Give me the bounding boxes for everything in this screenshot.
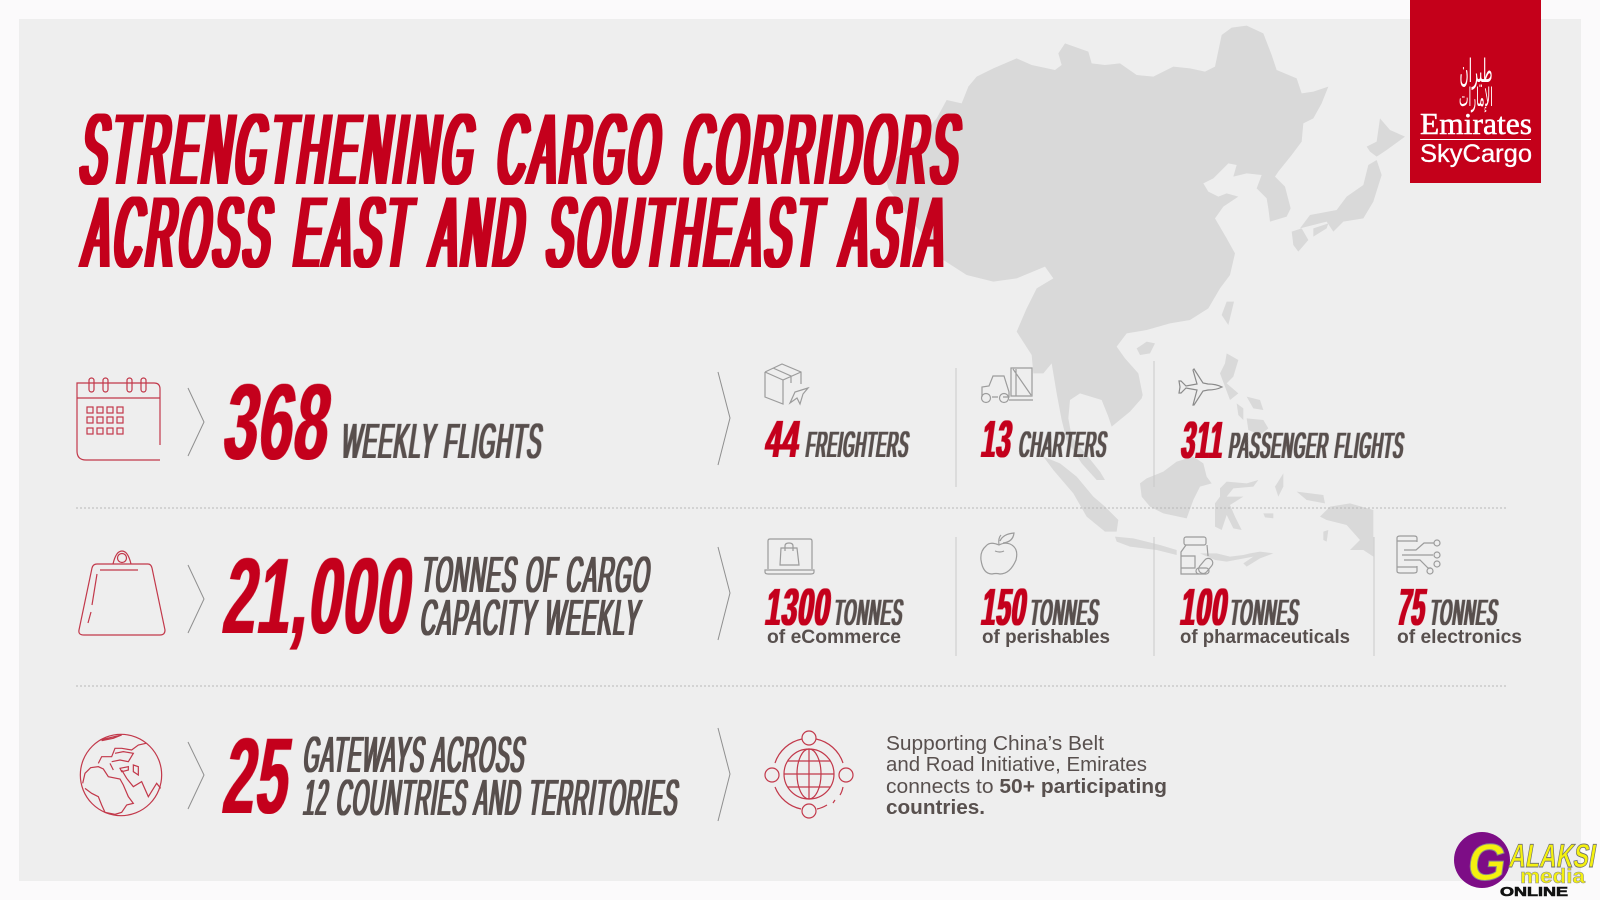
arrow: large chevron [718,728,730,821]
label: tonnes of cargo capacity weekly [417,546,655,646]
arrow: large chevron [718,547,730,640]
stat: 150 tonnes of perishables: 150 [978,579,1031,637]
arrow: chevron [188,742,204,809]
arrow: large chevron [718,372,730,465]
icon: box with plane [765,364,808,404]
icon: apple [981,533,1017,574]
row 2: tonnes capacity: CAPACITY WEEKLY [417,589,645,646]
stat: 100 tonnes of pharmaceuticals [1177,579,1350,648]
icon: network globe [765,731,853,818]
text: Belt and Road [886,733,1167,819]
stat: 150 tonnes of perishables [978,579,1110,648]
icon: weight [79,551,165,635]
row 2: tonnes capacity: TONNES OF CARGO [418,546,655,603]
stat: 13 charters [978,411,1111,469]
stat: 1300 tonnes of eCommerce: of eCommerce [767,627,901,648]
label: gateways across 12 countries and territories [300,726,683,826]
icon: earth globe [80,734,162,816]
icon: calendar [77,378,160,460]
title [75,92,972,289]
row 3: gateways [80,715,1167,836]
stat: 44 freighters [762,411,913,469]
row 2: tonnes capacity: TONNES [1028,591,1103,633]
stat: 150 tonnes of perishables: of perishables [982,627,1110,648]
stat: 100 tonnes of pharmaceuticals: TONNES [1228,591,1303,633]
icon: plane [1179,369,1222,405]
stat: 100 tonnes of pharmaceuticals: of pharmaceuticals [1180,627,1350,648]
icon: forklift [982,368,1033,402]
stat: 1300 tonnes of eCommerce: 1300 [762,579,835,637]
watermark: Galaksi Media Online: media [1520,866,1586,888]
stat: 100 tonnes of pharmaceuticals: 100 [1177,579,1232,637]
row 2: tonnes capacity: TONNES [832,591,907,633]
logo: Emirates SkyCargo: Emirates [1420,106,1532,141]
arrow: chevron [188,388,204,456]
arrow: chevron [188,565,204,633]
stat: 75 tonnes of electronics: 75 [1394,579,1430,637]
stat: 44 freighters: 44 [762,411,804,469]
row 1: weekly flights: FREIGHTERS [804,423,913,465]
stat: 75 tonnes of electronics [1394,579,1522,648]
stat: 21,000: 21,000 [218,535,422,656]
stat: 311 passenger flights: 311 [1178,412,1228,470]
stat: 75 tonnes of electronics: of electronics [1397,627,1522,648]
watermark: Galaksi Media Online: G [1464,834,1510,892]
logo: Emirates SkyCargo: طيران [1460,52,1492,90]
row 1: weekly flights: CHARTERS [1017,423,1111,465]
text: Belt and Road: countries. [886,797,985,819]
row 1: weekly flights: WEEKLY FLIGHTS [338,413,547,469]
text: Belt and Road: connects to 50+ participating [886,776,1167,798]
stat: 75 tonnes of electronics: TONNES [1428,591,1502,633]
text: Belt and Road: and Road Initiative, Emirates [886,754,1147,776]
row 1: weekly flights [77,361,1408,482]
icon: laptop bag [765,539,814,574]
watermark: Galaksi Media Online [1454,832,1599,899]
label: gateways across 12 countries and territories: GATEWAYS ACROSS [300,726,530,783]
row 2: tonnes capacity [79,533,1522,656]
stat: 311 passenger flights [1178,412,1408,470]
stat: 25: 25 [218,715,300,836]
dividers [76,361,1508,686]
stat: 368: 368 [218,361,340,482]
logo: Emirates SkyCargo: الإمارات [1459,82,1493,113]
logo: Emirates SkyCargo [1410,0,1541,183]
row 3: gateways: 12 COUNTRIES AND TERRITORIES [300,769,683,826]
logo: Emirates SkyCargo: SkyCargo [1420,140,1532,168]
stat: 13 charters: 13 [978,411,1016,469]
text: Belt and Road: Supporting China’s Belt [886,733,1104,755]
watermark: Galaksi Media Online: ONLINE [1500,884,1568,899]
icon: pill bottle [1181,537,1215,575]
map: East and Southeast Asia [883,26,1405,567]
icon: electronics [1397,536,1440,574]
